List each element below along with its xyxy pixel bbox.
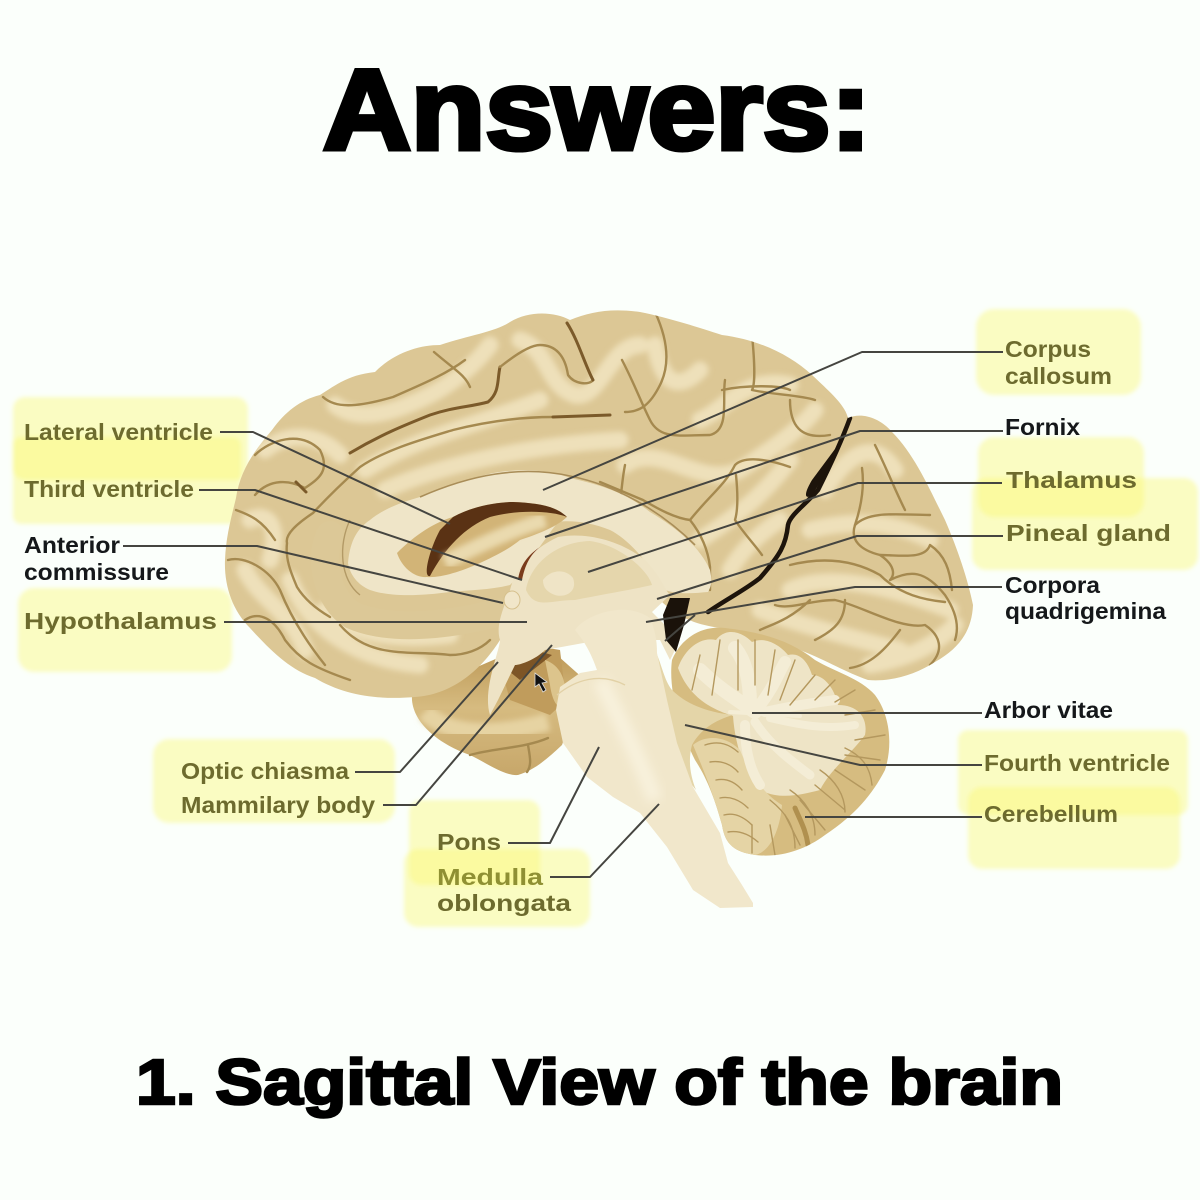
sulci <box>323 360 465 405</box>
label: Medulla oblongata: oblongata <box>437 890 571 916</box>
parieto-occipital sulcus <box>708 418 850 612</box>
region beneath the hypothalamus <box>500 645 566 715</box>
label: Thalamus: Thalamus <box>1006 467 1137 493</box>
arbor vitae <box>700 648 855 785</box>
label: Corpora quadrigemina: quadrigemina <box>1005 598 1166 624</box>
mouse cursor <box>535 673 547 692</box>
label: Lateral ventricle: Lateral ventricle <box>24 419 213 445</box>
cerebrum <box>225 310 973 698</box>
corpus callosum <box>348 470 711 595</box>
fourth ventricle band <box>655 650 733 790</box>
thalamus and brainstem core <box>488 536 680 715</box>
label: Pineal gland <box>657 520 1171 599</box>
upper white-matter lobes <box>678 632 866 796</box>
label: Third ventricle: Third ventricle <box>24 476 194 502</box>
folia <box>692 640 815 705</box>
label: Anterior commissure <box>24 532 503 603</box>
label: Fourth ventricle: Fourth ventricle <box>984 750 1170 776</box>
label: Corpus callosum: callosum <box>1005 363 1112 389</box>
label: Lateral ventricle <box>24 419 450 524</box>
label: Fornix: Fornix <box>1005 414 1080 440</box>
label: Anterior commissure: Anterior <box>24 532 120 558</box>
label: Mammilary body <box>181 645 552 818</box>
label: Corpora quadrigemina: Corpora <box>1005 572 1100 598</box>
caption: 1. Sagittal View of the brain <box>136 1046 1063 1118</box>
label: Anterior commissure: commissure <box>24 559 169 585</box>
lower folia lobe <box>693 738 782 855</box>
label: Corpus callosum <box>543 336 1112 490</box>
pons and medulla <box>556 610 753 908</box>
dark gap behind the midbrain <box>663 598 690 652</box>
lateral ventricle opening <box>397 502 567 577</box>
label: Hypothalamus: Hypothalamus <box>24 608 217 634</box>
yellow highlighter marks <box>13 309 1198 927</box>
label: Corpus callosum: Corpus <box>1005 336 1091 362</box>
label: Medulla oblongata: Medulla <box>437 864 543 890</box>
label: Optic chiasma: Optic chiasma <box>181 758 349 784</box>
label: Thalamus <box>588 467 1137 572</box>
label: Pons: Pons <box>437 829 501 855</box>
label: Arbor vitae: Arbor vitae <box>984 697 1113 723</box>
label: Fornix <box>545 414 1080 537</box>
gyri highlights <box>245 340 955 665</box>
label: Corpora quadrigemina <box>646 572 1166 641</box>
cerebellum <box>671 628 889 856</box>
label: Mammilary body: Mammilary body <box>181 792 375 818</box>
temporal lobe underside <box>412 640 585 775</box>
label: Fourth ventricle <box>685 725 1170 776</box>
label: Cerebellum: Cerebellum <box>984 801 1118 827</box>
label: Pons <box>437 747 599 855</box>
title: Answers: <box>323 47 871 174</box>
brain illustration <box>225 310 973 908</box>
label: Pineal gland: Pineal gland <box>1006 520 1171 546</box>
label: Optic chiasma <box>181 662 498 784</box>
label: Medulla oblongata <box>437 804 659 916</box>
label: Third ventricle <box>24 476 522 580</box>
